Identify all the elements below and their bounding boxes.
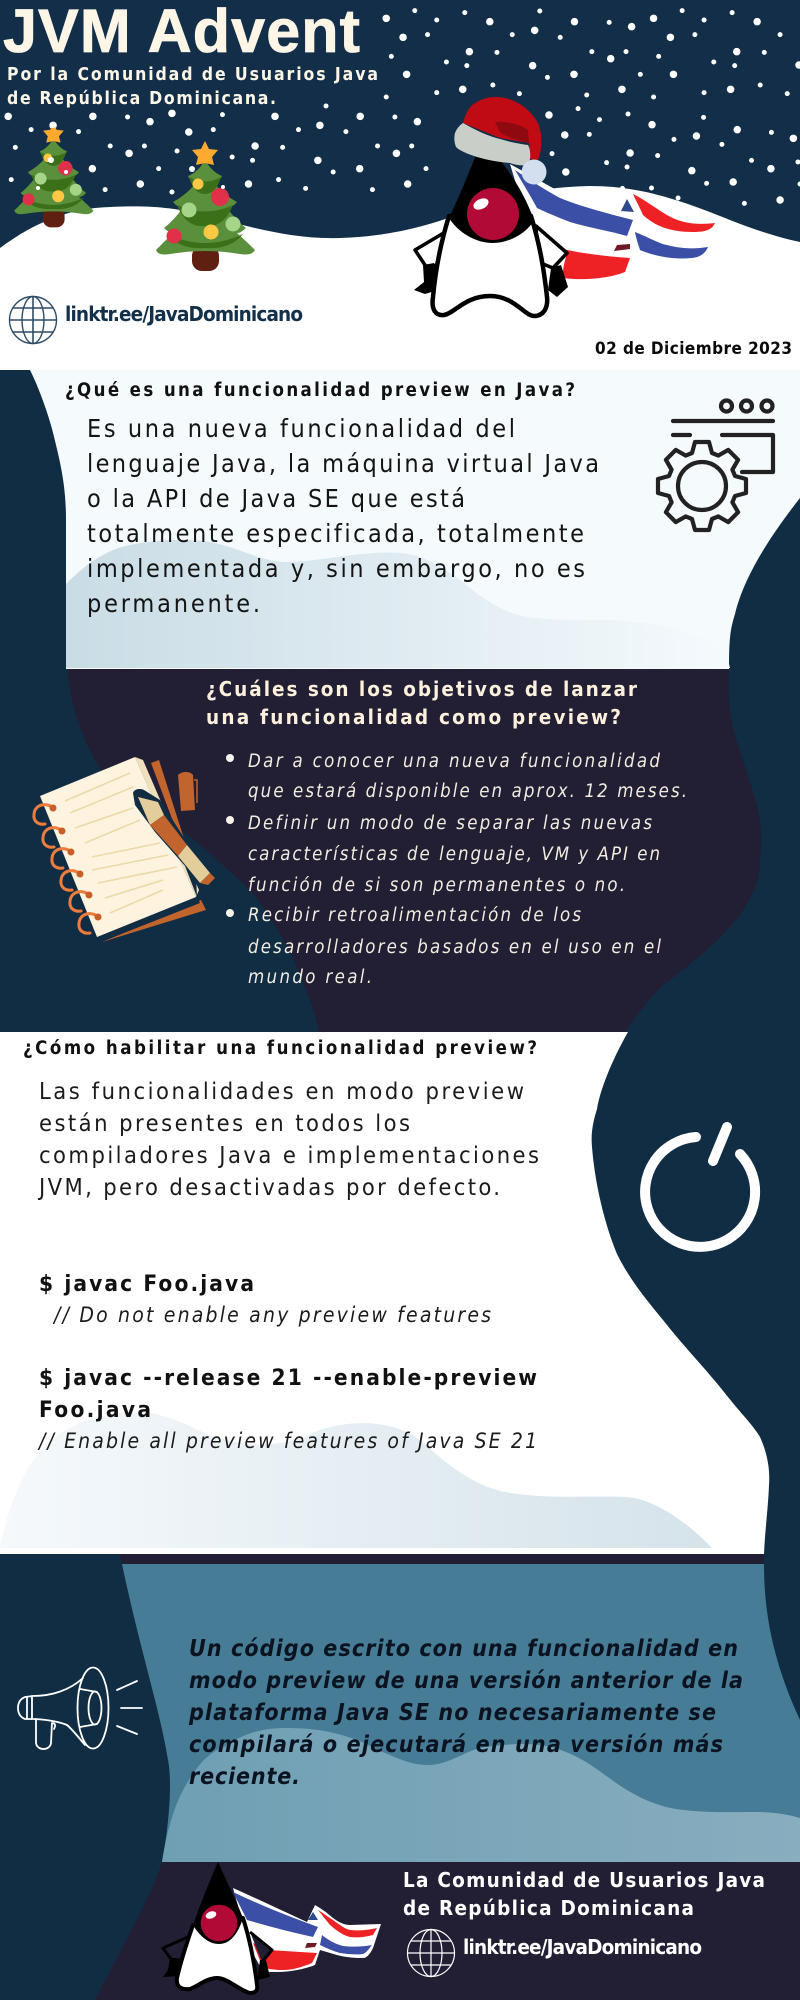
panel: objectives of preview [34,669,762,1032]
icon: gear and window [658,400,773,530]
body text: implementada y, sin embargo, no es [87,554,585,583]
icon: notebook and pen [34,757,215,942]
icon: power button [645,1127,755,1247]
body text: totalmente especificada, totalmente [87,519,584,548]
link: linktr.ee/JavaDominicano [65,302,303,326]
icon: footer Duke [163,1862,272,1993]
body text [37,1077,539,1201]
callout text: modo preview de una versión anterior de la [189,1668,743,1694]
footer title [403,1868,765,1920]
icon: Dominican flag behind Duke [510,164,720,284]
bullet list: Definir un modo de separar las nuevas [248,813,652,834]
body text: están presentes en todos los [39,1109,410,1137]
heading: ¿Qué es una funcionalidad preview en Java? [65,380,575,401]
footer title: de República Dominicana [403,1896,694,1920]
ring holes [50,804,102,920]
body text: compiladores Java e implementaciones [39,1141,539,1169]
icon: large christmas tree [156,141,255,271]
snow flakes over trees [36,122,225,190]
heading: ¿Cuáles son los objetivos de lanzar [206,677,638,701]
snow ground [0,186,800,370]
Duke nose [467,188,519,240]
bullet list: función de si son permanentes o no. [248,875,625,896]
spiral rings [34,805,98,933]
panel background [30,370,800,669]
callout text: reciente. [189,1764,300,1790]
bullet list: mundo real. [248,967,372,988]
icon: Duke mascot with santa hat [414,97,568,316]
heading: ¿Cómo habilitar una funcionalidad preview? [23,1038,537,1059]
icon: small christmas tree [14,123,93,227]
body text: o la API de Java SE que está [87,484,465,513]
subtitle: Por la Comunidad de Usuarios Java [7,65,378,85]
bullet list: Recibir retroalimentación de los [248,905,581,926]
icon: footer flag [233,1888,381,1972]
heading: una funcionalidad como preview? [206,705,621,729]
bullet list [226,751,687,988]
callout text: plataforma Java SE no necesariamente se [188,1700,716,1726]
Duke arms [415,226,567,268]
body text: Las funcionalidades en modo preview [39,1077,524,1105]
falling snow [8,11,800,203]
body text: permanente. [87,589,260,618]
code example 2: // Enable all preview features of Java SE 21 [37,1429,537,1453]
Duke head [449,150,534,243]
callout text [188,1636,743,1790]
panel: how to enable preview [0,1032,769,1554]
santa hat [463,97,541,160]
callout text: compilará o ejecutará en una versión más [189,1732,723,1758]
night sky [0,0,800,260]
soft wave [66,540,730,668]
bookmark and cap [151,760,186,845]
Duke body [433,216,547,316]
icon: footer globe [408,1930,454,1976]
bullet list: características de lenguaje, VM y API en [248,844,660,865]
page lines [65,773,177,913]
panel: header [0,0,800,370]
bullet list: que estará disponible en aprox. 12 meses. [248,781,687,802]
code example 1: $ javac Foo.java [39,1271,254,1297]
code example 2: Foo.java [39,1397,151,1423]
subtitle [7,65,378,109]
code example 2: $ javac --release 21 --enable-preview [39,1365,537,1391]
soft wave [162,1728,800,1862]
date: 02 de Diciembre 2023 [595,339,792,359]
Duke hands [414,263,568,297]
body text: Es una nueva funcionalidad del [87,414,515,443]
body text: lenguaje Java, la máquina virtual Java [87,449,599,478]
panel background [67,669,762,1032]
back page [135,757,199,897]
subtitle: de República Dominicana. [7,89,276,109]
code example 2 [37,1365,537,1453]
soft wave [0,1412,712,1548]
back cover [102,900,206,942]
body text: JVM, pero desactivadas por defecto. [37,1173,500,1201]
footer link: linktr.ee/JavaDominicano [463,1935,702,1959]
footer title: La Comunidad de Usuarios Java [403,1868,765,1892]
panel: footer [95,1862,800,2000]
body text [87,414,599,618]
bullet list: Dar a conocer una nueva funcionalidad [248,751,660,772]
icon: megaphone [18,1668,142,1749]
bullet list: desarrolladores basados en el uso en el [248,937,661,958]
panel: warning callout [18,1554,800,1862]
footer background [95,1862,800,2000]
panel background [122,1564,800,1862]
top strip [120,1554,764,1564]
heading [206,677,638,729]
panel: what is a preview feature [30,370,800,669]
code example 1: // Do not enable any preview features [52,1303,491,1327]
callout text: Un código escrito con una funcionalidad en [189,1636,738,1662]
panel background [0,1032,769,1554]
page [40,757,196,937]
pen [133,789,197,897]
code example 1 [39,1271,491,1327]
icon: globe [10,296,56,344]
